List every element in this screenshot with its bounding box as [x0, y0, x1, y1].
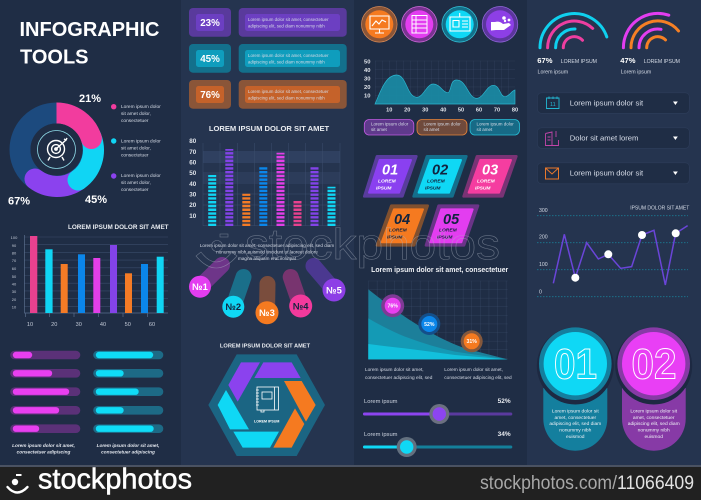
icon circle: hand with coins — [482, 6, 518, 42]
heading: hexagon: LOREM IPSUM DOLOR SIT AMET — [220, 344, 311, 350]
donut chart — [20, 113, 102, 187]
progress captions — [12, 443, 159, 454]
numbered pills — [189, 265, 346, 324]
area chart: 50 — [458, 108, 464, 114]
layered area chart with bubbles: 52% — [424, 322, 435, 328]
progress captions: consectetuer adipiscing — [101, 450, 155, 454]
arc stats: left: 67% — [537, 56, 553, 65]
heading: bar chart: LOREM IPSUM DOLOR SIT AMET — [68, 224, 169, 231]
watermark: stockphotos — [245, 220, 500, 269]
arc stats: right — [620, 56, 680, 76]
card 02: euismod — [644, 434, 663, 440]
bar chart: 30 — [76, 322, 82, 328]
title: INFOGRAPHIC — [20, 19, 160, 41]
bar chart: 20 — [12, 297, 17, 302]
card 02: 02 — [632, 340, 676, 388]
title — [20, 19, 160, 68]
slider 52% — [363, 398, 512, 424]
bar chart: 40 — [100, 322, 106, 328]
donut percent labels: 67% — [8, 196, 30, 208]
icon circle: document — [402, 6, 437, 42]
arc stats: right: Lorem ipsum — [621, 70, 652, 76]
stat row 23%: Lorem ipsum dolor sit amet, consectetuer — [248, 17, 329, 22]
card 01: nonummy nibh — [559, 428, 592, 434]
concentric arcs: right — [623, 13, 678, 48]
card 02 — [615, 327, 692, 451]
dropdown: mail — [538, 163, 689, 184]
card 02: nonummy nibh — [638, 428, 670, 434]
card 02: adipiscing elit, sed diam — [628, 421, 680, 427]
stat row 23%: 23% — [200, 18, 220, 29]
stat row 76%: Lorem ipsum dolor sit amet, consectetuer — [248, 89, 329, 94]
stat row 45%: Lorem ipsum dolor sit amet, consectetuer — [248, 53, 329, 58]
heading: segmented chart: LOREM IPSUM DOLOR SIT AMET — [209, 124, 330, 133]
bar chart: 60 — [149, 322, 155, 328]
dropdown: document — [538, 128, 689, 148]
numbered tags: IPSUM — [376, 186, 392, 192]
donut legend: sit amet dolor, — [121, 146, 151, 152]
card 01 — [537, 327, 614, 451]
donut legend: consectetuer — [121, 187, 149, 193]
donut percent labels: 21% — [79, 93, 101, 105]
numbered tags: IPSUM — [425, 186, 441, 192]
segmented bar chart: 60 — [189, 160, 197, 166]
bar chart — [11, 235, 168, 328]
segmented bar chart: 10 — [189, 213, 197, 220]
area chart: 20 — [404, 108, 410, 114]
bar chart: 70 — [12, 258, 17, 263]
pill chart paragraph — [200, 243, 334, 261]
footer logo: stockphotos — [38, 464, 192, 496]
area chart — [364, 60, 518, 114]
card 01: adipiscing elit, sed diam — [549, 421, 601, 427]
area chart: 30 — [364, 76, 370, 82]
area chart: 10 — [386, 108, 392, 114]
bar chart: 10 — [12, 304, 17, 310]
stat row 45% — [189, 44, 347, 73]
donut legend: consectetuer — [121, 118, 149, 124]
footer url: stockphotos.com/11066409 — [480, 473, 694, 494]
slider 34%: Lorem ipsum — [364, 432, 398, 438]
line chart: 300 — [539, 208, 548, 214]
dropdown: calendar: Lorem ipsum dolor sit — [570, 99, 644, 108]
area chart: 70 — [494, 108, 500, 114]
bar chart: 100 — [11, 235, 18, 240]
area chart legend: Lorem ipsum dolor — [371, 122, 409, 126]
numbered tags — [364, 156, 516, 245]
dropdown: calendar — [538, 93, 689, 113]
area chart legend: Lorem ipsum dolor — [424, 122, 461, 126]
numbered tags: LOREM — [439, 228, 458, 234]
numbered tags: 05 — [443, 212, 460, 228]
progress captions: consectetuer adipiscing — [17, 450, 70, 454]
bar chart: 40 — [12, 282, 17, 286]
card 01: euismod — [566, 434, 585, 440]
slider 34% — [363, 431, 512, 457]
donut legend — [111, 104, 161, 193]
concentric arcs: left — [540, 14, 607, 48]
footer bar — [0, 464, 701, 500]
wave chart captions — [365, 367, 512, 381]
card 01: amet, consectetuer — [555, 415, 596, 421]
stat row 76% — [189, 80, 347, 109]
progress bars: magenta — [14, 355, 76, 429]
area chart legend: sit amet — [371, 127, 388, 132]
numbered pills: №1 — [192, 281, 208, 292]
line chart — [537, 206, 689, 297]
line chart: 200 — [539, 234, 548, 240]
hexagon diagram — [208, 354, 325, 456]
icon circle: id card — [442, 6, 478, 42]
numbered tags: LOREM — [427, 178, 446, 184]
bar chart: 60 — [12, 266, 17, 271]
stat row 45%: adipiscing elit, sed diam nonummy nibh — [248, 60, 325, 64]
stat row 76%: 76% — [200, 90, 220, 101]
donut legend: consectetuer — [121, 152, 149, 158]
bar chart: 80 — [12, 250, 17, 256]
segmented bar chart: 80 — [189, 138, 197, 145]
segmented bar chart: 20 — [189, 202, 197, 209]
arc stats: left: Lorem ipsum — [538, 70, 569, 76]
arc stats: right: 47% — [620, 56, 636, 65]
donut legend: sit amet dolor, — [121, 111, 151, 117]
numbered tags: LOREM — [477, 178, 496, 184]
progress captions: Lorem ipsum dolor sit amet, — [97, 443, 159, 448]
line chart: 100 — [539, 262, 548, 268]
donut percent labels: 45% — [85, 194, 107, 206]
numbered tags: 02 — [432, 162, 448, 178]
area chart: 10 — [364, 94, 370, 100]
numbered pills: №5 — [326, 284, 342, 296]
layered area chart with bubbles: 31% — [467, 339, 477, 345]
stat row 76%: adipiscing elit, sed diam nonummy nibh — [248, 96, 325, 100]
segmented bar chart: 50 — [189, 170, 197, 177]
area chart: 40 — [364, 68, 370, 74]
donut legend: sit amet dolor, — [121, 180, 151, 186]
progress captions: Lorem ipsum dolor sit amet, — [12, 443, 75, 448]
area chart: 40 — [440, 108, 446, 114]
donut legend: Lorem ipsum dolor — [121, 173, 161, 179]
dropdown: document: Dolor sit amet lorem — [570, 134, 638, 143]
donut percent labels — [8, 93, 107, 208]
bar chart: 20 — [51, 322, 57, 328]
wave chart captions: Lorem ipsum dolor sit amet, — [444, 367, 503, 373]
wave chart captions: consectetuer adipiscing elit, sed — [365, 375, 433, 381]
numbered tags: IPSUM — [387, 234, 403, 240]
hexagon diagram: LOREM IPSUM — [254, 420, 279, 424]
donut legend: Lorem ipsum dolor — [121, 104, 161, 110]
wave chart captions: consectetuer adipiscing elit, sed — [444, 375, 512, 381]
numbered tags: 01 — [382, 162, 398, 178]
stat row 23% — [189, 8, 347, 37]
area chart: 20 — [364, 85, 370, 91]
card 01: Lorem ipsum dolor sit — [552, 408, 599, 414]
area chart legend: sit amet — [476, 127, 493, 132]
area chart: 80 — [512, 108, 518, 114]
numbered tags: IPSUM — [475, 186, 491, 192]
numbered tags: 04 — [394, 212, 410, 228]
numbered pills: №3 — [259, 307, 275, 318]
icon: target — [48, 138, 67, 160]
card 01: 01 — [554, 340, 597, 388]
title: TOOLS — [20, 46, 89, 68]
segmented bar chart: 70 — [189, 149, 197, 156]
area chart legend: Lorem ipsum dolor — [476, 122, 514, 126]
numbered pills: №4 — [293, 300, 309, 312]
wave chart captions: Lorem ipsum dolor sit amet, — [365, 367, 424, 373]
numbered tags: IPSUM — [437, 234, 453, 240]
numbered tags: LOREM — [389, 228, 408, 234]
segmented bar chart: 30 — [189, 192, 197, 198]
line chart: 0 — [539, 289, 542, 295]
area chart legend — [364, 120, 520, 135]
area chart: 60 — [476, 108, 482, 114]
bar chart: 50 — [125, 322, 131, 328]
pill chart paragraph: nonummy nibh euismod tincidunt ut laoreet dolore — [216, 250, 318, 254]
area chart: 50 — [364, 60, 370, 66]
donut legend: Lorem ipsum dolor — [121, 138, 161, 144]
area chart: 30 — [422, 108, 428, 114]
line chart: IPSUM DOLOR SIT AMET — [630, 206, 689, 212]
icon: notebook — [256, 387, 278, 412]
card 02: Lorem ipsum dolor sit — [630, 408, 678, 414]
arc stats: left — [537, 56, 597, 76]
bar chart: 10 — [27, 322, 33, 328]
layered area chart with bubbles: 76% — [388, 304, 398, 310]
numbered tags: 03 — [482, 162, 498, 178]
segmented bar chart — [189, 138, 340, 226]
pill chart paragraph: Lorem ipsum dolor sit amet, consectetuer adipiscing elit, sed diam — [200, 243, 334, 248]
numbered pills: №2 — [225, 301, 241, 312]
arc stats: left: LOREM IPSUM — [561, 59, 597, 65]
bar chart: 30 — [12, 289, 17, 294]
heading: wave chart: Lorem ipsum dolor sit amet, consectetuer — [371, 267, 509, 274]
layered area chart with bubbles — [368, 281, 508, 359]
slider 52%: Lorem ipsum — [364, 399, 398, 405]
dropdown: calendar: 11 — [550, 102, 556, 108]
segmented bar chart: 40 — [189, 181, 197, 188]
bar chart: 50 — [12, 274, 17, 279]
arc stats: right: LOREM IPSUM — [644, 59, 680, 65]
numbered tags: LOREM — [378, 178, 397, 184]
progress bars: cyan — [98, 355, 159, 429]
bar chart: 90 — [12, 243, 17, 248]
stat row 23%: adipiscing elit, sed diam nonummy nibh — [248, 24, 325, 28]
slider 52%: 52% — [498, 398, 511, 405]
stat row 45%: 45% — [200, 54, 220, 65]
icon circle: monitor chart — [362, 6, 397, 42]
area chart legend: sit amet — [424, 127, 440, 132]
pill chart paragraph: magna aliquam erat volutpat — [238, 256, 297, 261]
card 02: amet, consectetuer — [633, 415, 675, 421]
dropdown: mail: Lorem ipsum dolor sit — [570, 169, 644, 178]
slider 34%: 34% — [498, 431, 511, 438]
